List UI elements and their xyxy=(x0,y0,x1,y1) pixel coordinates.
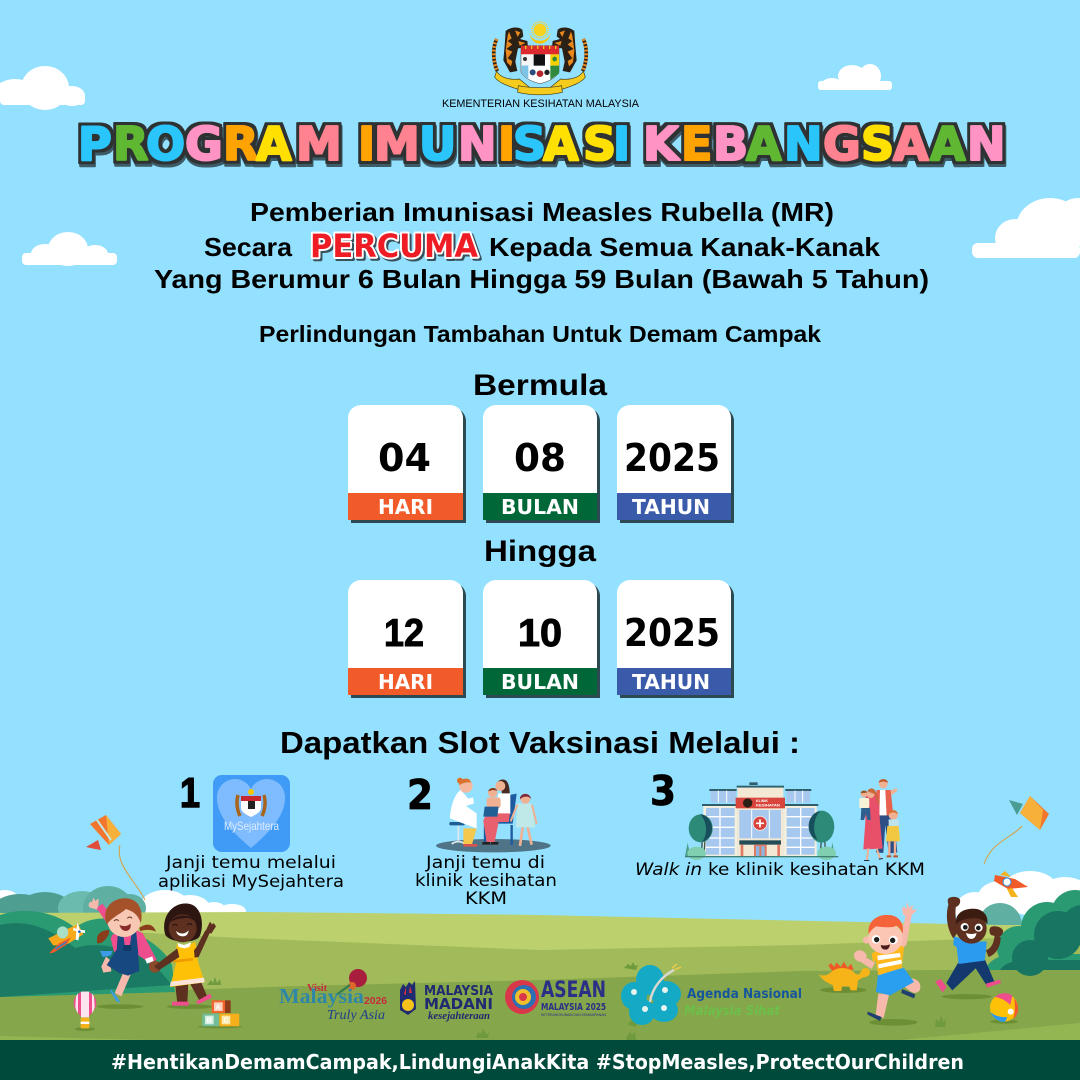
illustration: beach ball xyxy=(990,993,1018,1024)
caption: Walk in ke klinik kesihatan KKM xyxy=(635,860,925,880)
text: subheading: Perlindungan Tambahan Untuk Demam Campak xyxy=(259,321,821,347)
heading: booking channels: Dapatkan Slot Vaksinasi Melalui : xyxy=(280,725,800,760)
illustration: dinosaur toy xyxy=(819,962,870,993)
text: line 1: Pemberian Imunisasi Measles Rubella (MR) xyxy=(250,197,834,227)
title: B xyxy=(713,117,748,171)
card: year 2025: 2025 xyxy=(624,611,720,655)
logo: ASEAN Malaysia 2025: MALAYSIA 2025 xyxy=(541,1002,606,1013)
title: O xyxy=(146,117,185,171)
logo: Visit Malaysia 2026: Visit xyxy=(307,982,327,994)
title: I xyxy=(498,117,515,171)
text: line 3: Yang Berumur 6 Bulan Hingga 59 Bulan (Bawah 5 Tahun) xyxy=(154,264,929,294)
card: day 04: HARI xyxy=(378,495,433,519)
caption: klinik kesihatan xyxy=(415,871,557,891)
card: year 2025: TAHUN xyxy=(632,670,710,694)
text: Kepada Semua: Kepada Semua Kanak-Kanak xyxy=(489,232,881,262)
card: month 10 xyxy=(483,580,600,698)
title: A xyxy=(930,117,966,171)
icon: hibiscus xyxy=(621,964,681,1025)
icon: left tiger xyxy=(494,28,528,72)
caption: aplikasi MySejahtera xyxy=(158,872,344,892)
logo: Agenda Nasional Malaysia Sihat: Malaysia Sihat xyxy=(684,1004,781,1019)
logo: Visit Malaysia 2026: 2026 xyxy=(364,996,387,1007)
logo: ASEAN Malaysia 2025: KETERANGKUMAN DAN KEMAMPANAN xyxy=(541,1012,606,1017)
date cards: end xyxy=(348,580,734,698)
heading: Hingga: Hingga xyxy=(484,535,596,568)
logo: Visit Malaysia 2026 xyxy=(279,969,387,1023)
icon: MySejahtera app xyxy=(213,775,290,852)
cloud: middle left xyxy=(22,232,117,266)
number 3: 3 xyxy=(650,767,676,815)
title: A xyxy=(256,117,292,171)
logo: Malaysia Madani: kesejahteraan xyxy=(428,1011,490,1022)
clouds behind hills xyxy=(0,871,1080,928)
illustration: clinic building: KLINIK xyxy=(756,799,769,803)
card: day 04 xyxy=(348,405,466,523)
grass tufts xyxy=(207,962,946,1040)
card: month 08: 08 xyxy=(514,436,566,480)
caption xyxy=(415,853,557,909)
illustration: clinic building: KESIHATAN xyxy=(756,804,781,808)
card: year 2025 xyxy=(617,580,734,698)
landscape background xyxy=(0,871,1080,1040)
intro text block xyxy=(154,197,929,347)
card: year 2025: 2025 xyxy=(624,436,720,480)
illustration: boy in blue shirt xyxy=(935,897,1003,999)
card: year 2025: TAHUN xyxy=(632,495,710,519)
illustration: left kite xyxy=(86,815,145,900)
title: N xyxy=(458,117,496,171)
card: month 10: BULAN xyxy=(501,670,579,694)
logo: Malaysia Madani: MALAYSIA xyxy=(424,984,493,999)
title: I xyxy=(358,117,375,171)
title: M xyxy=(296,117,342,171)
title: S xyxy=(513,117,546,171)
title: A xyxy=(543,117,579,171)
icon: star and crescent xyxy=(529,22,551,44)
illustration: boy with red hair xyxy=(854,902,920,1026)
caption: Janji temu melalui xyxy=(165,853,336,873)
title: S xyxy=(861,117,894,171)
text: PERCUMA highlight: PERCUMA xyxy=(310,227,478,265)
background hills xyxy=(0,886,1022,947)
text: ministry name: KEMENTERIAN KESIHATAN MALAYSIA xyxy=(442,98,640,110)
title: M xyxy=(374,117,420,171)
title: K xyxy=(643,117,681,171)
logo: Visit Malaysia 2026: Truly Asia xyxy=(327,1008,385,1023)
logo: Malaysia Madani xyxy=(400,981,493,1022)
illustration: hot air balloon xyxy=(74,991,96,1031)
heading: Bermula: Bermula xyxy=(473,369,607,402)
title: G xyxy=(185,117,223,171)
caption: Janji temu di xyxy=(425,853,545,873)
icon: shield xyxy=(521,46,559,84)
card: year 2025 xyxy=(617,405,734,523)
logo: Visit Malaysia 2026: Malaysia xyxy=(279,984,365,1008)
logo: Malaysian coat of arms xyxy=(494,22,586,95)
title: U xyxy=(419,117,456,171)
illustration: toy plane xyxy=(48,922,85,953)
footer hashtags: #HentikanDemamCampak,LindungiAnakKita #StopMeasles,ProtectOurChildren xyxy=(111,1050,964,1074)
illustration: alphabet blocks xyxy=(198,1000,242,1028)
cloud: middle right xyxy=(972,198,1080,258)
card: day 12: HARI xyxy=(378,670,433,694)
logo: Malaysia Madani: MADANI xyxy=(424,995,493,1013)
card: month 10: 10 xyxy=(518,612,562,655)
meadow layers xyxy=(0,912,1080,1040)
illustration: doctor with mother and children xyxy=(436,778,551,852)
option 2: clinic appointment xyxy=(407,771,557,909)
title: N xyxy=(784,117,822,171)
title: I xyxy=(613,117,630,171)
text: Secara: Secara xyxy=(204,232,293,262)
icon: right tiger xyxy=(552,28,586,72)
illustration: right kite xyxy=(984,796,1049,864)
illustration: alphabet blocks: B xyxy=(207,1016,212,1025)
title: G xyxy=(823,117,861,171)
card: month 08 xyxy=(483,405,600,523)
logo: ASEAN Malaysia 2025 xyxy=(505,978,606,1017)
caption xyxy=(158,853,344,892)
right bushes xyxy=(985,890,1080,970)
card: month 08: BULAN xyxy=(501,495,579,519)
cloud: top right xyxy=(818,64,892,90)
option 1: MySejahtera xyxy=(158,769,344,892)
card: day 04: 04 xyxy=(378,436,431,480)
logo: Agenda Nasional Malaysia Sihat xyxy=(621,964,802,1025)
illustration: clinic building xyxy=(685,782,838,860)
title: E xyxy=(681,117,712,171)
logo: ASEAN Malaysia 2025: ASEAN xyxy=(541,978,606,1003)
option 3: walk in xyxy=(635,767,925,880)
title: P xyxy=(78,117,112,171)
title: R xyxy=(113,117,148,171)
title: S xyxy=(583,117,616,171)
title: R xyxy=(223,117,258,171)
title: A xyxy=(893,117,929,171)
illustration: rocket xyxy=(994,871,1028,897)
number 2: 2 xyxy=(407,771,433,819)
icon: motto ribbon xyxy=(495,71,585,95)
number 1: 1 xyxy=(180,769,200,816)
illustration: family xyxy=(859,779,900,861)
left hill mounds xyxy=(0,911,175,997)
card: day 12 xyxy=(348,580,466,698)
illustration: girl with pigtails xyxy=(89,898,161,1009)
footer band xyxy=(0,1040,1080,1080)
cloud: top left xyxy=(0,66,85,110)
date cards: start xyxy=(348,405,734,523)
card: day 12: 12 xyxy=(384,612,424,655)
illustration: alphabet blocks: C xyxy=(223,1016,229,1025)
illustration: alphabet blocks: A xyxy=(215,1002,221,1011)
title: N xyxy=(967,117,1006,171)
illustration: girl in yellow dress xyxy=(154,903,216,1009)
logo: Agenda Nasional Malaysia Sihat: Agenda Nasional xyxy=(687,987,802,1002)
icon: MySejahtera app: MySejahtera xyxy=(224,819,279,833)
title: A xyxy=(746,117,782,171)
caption: KKM xyxy=(465,889,507,909)
